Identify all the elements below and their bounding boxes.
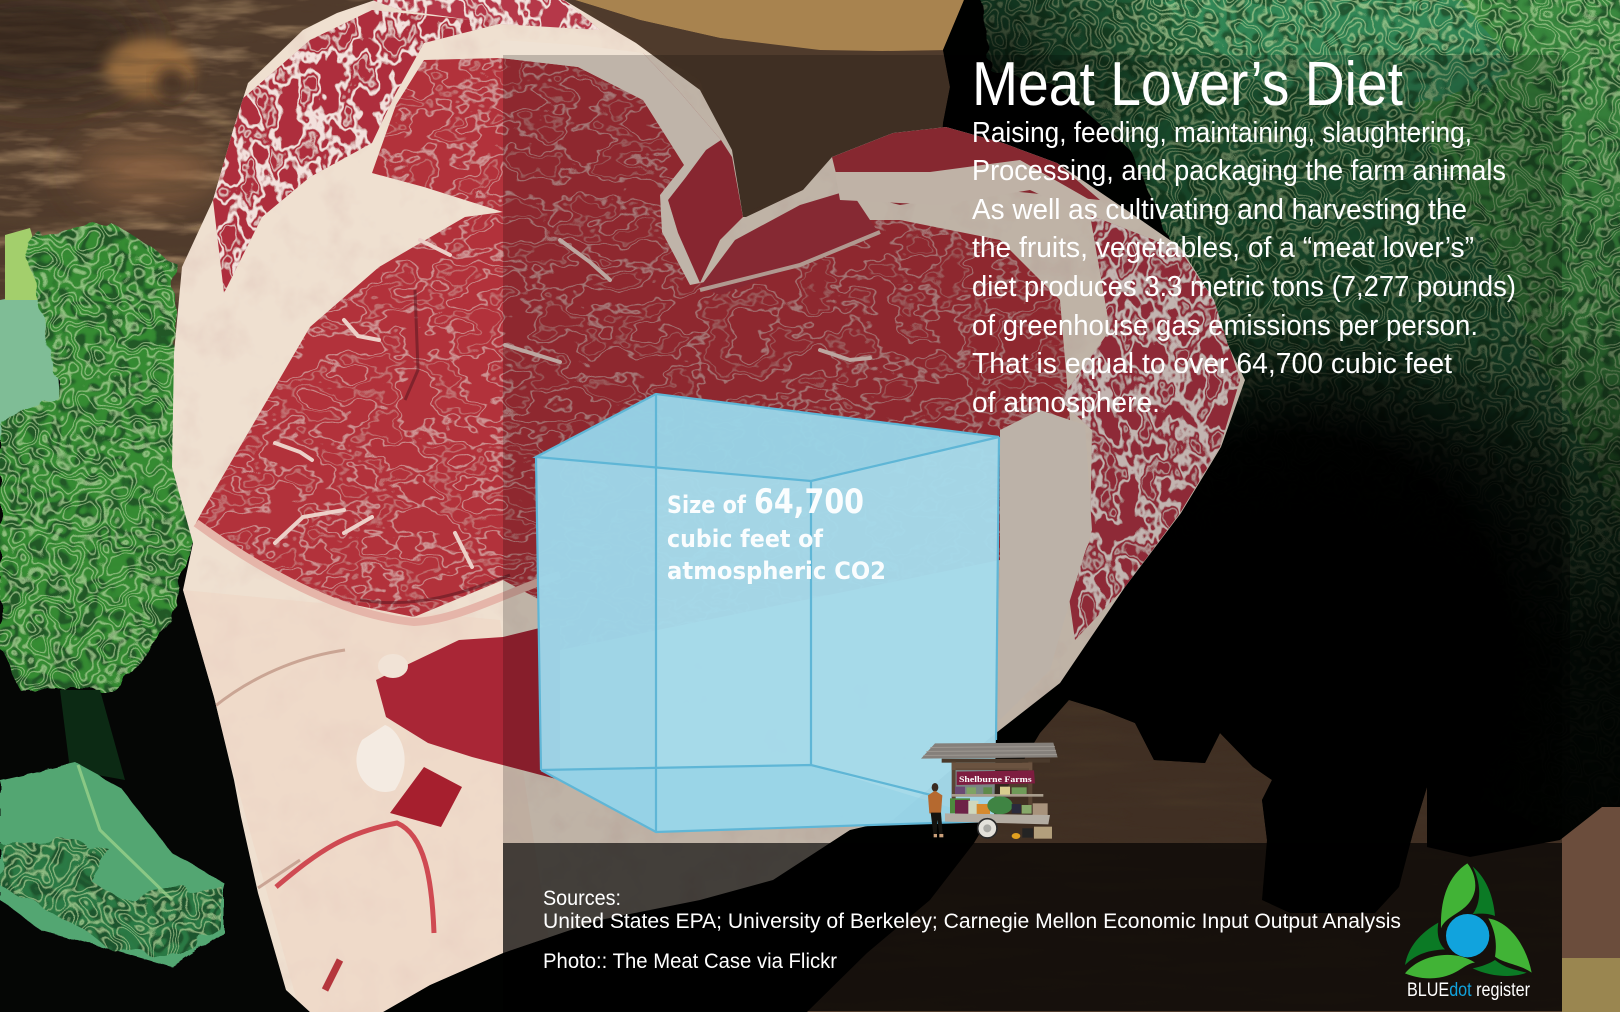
cube bottom face bbox=[541, 765, 994, 832]
kale on right bbox=[940, 0, 1620, 860]
text block: diet description: Processing, and packaging the farm animals bbox=[972, 155, 1506, 187]
text block: cube label bbox=[667, 482, 886, 585]
text block: diet description: That is equal to over 64,700 cubic feet bbox=[972, 348, 1452, 380]
text block: diet description: the fruits, vegetables, of a “meat lover’s” bbox=[972, 232, 1474, 264]
lower flesh patch bbox=[376, 623, 560, 780]
produce bbox=[952, 794, 1043, 797]
marbled upper-left lobe bbox=[213, 10, 503, 293]
banner bbox=[957, 770, 1035, 785]
title: Meat Lover’s Diet bbox=[972, 50, 1403, 119]
chart: CO2 volume cube bbox=[536, 394, 999, 832]
red sinew bbox=[390, 767, 462, 827]
person bbox=[928, 783, 943, 837]
illustration: farm stand and person for scale bbox=[921, 743, 1058, 839]
black shadow at lower left bbox=[0, 350, 330, 1012]
flap of meat at notch bbox=[700, 190, 880, 295]
rib strip at top of right lobe bbox=[832, 127, 1100, 205]
right fat patch bbox=[1000, 410, 1092, 602]
fat nub bbox=[378, 654, 408, 678]
text block: diet description: of greenhouse gas emissions per person. bbox=[972, 310, 1478, 342]
text block: sources: Photo:: The Meat Case via Flickr bbox=[543, 950, 837, 973]
wood right of panel bbox=[1562, 790, 1620, 960]
text block: cube label: atmospheric CO2 bbox=[667, 557, 886, 585]
lower fat warm tone bbox=[183, 590, 560, 1012]
steak bbox=[150, 0, 1260, 1012]
text block: diet description: Raising, feeding, maintaining, slaughtering, bbox=[972, 117, 1472, 149]
text block: cube label: cubic feet of bbox=[667, 525, 824, 553]
cube edges bbox=[536, 394, 999, 832]
right marbled flesh bbox=[1060, 215, 1240, 640]
roof bbox=[921, 743, 1058, 759]
dark creases on steak bbox=[360, 290, 510, 603]
curved sinew line bbox=[276, 823, 434, 933]
panel: footer dark band bbox=[503, 843, 1562, 1011]
fat cap curve on the upper eye bbox=[500, 40, 721, 285]
cube body bbox=[536, 394, 999, 832]
text block: cube label: Size of bbox=[667, 491, 746, 519]
thick white veins in the flesh bbox=[275, 240, 870, 567]
wordmark: BLUEdot register bbox=[1407, 980, 1531, 1001]
wheel bbox=[978, 819, 997, 838]
fat crease lines bbox=[196, 523, 560, 622]
red rim beyond fat cap bbox=[643, 53, 743, 283]
logo: BLUEdot register bbox=[1405, 863, 1532, 1001]
kale upper left bbox=[0, 222, 190, 690]
text block: diet description: As well as cultivating and harvesting the bbox=[972, 194, 1467, 226]
main flesh of the steak bbox=[196, 58, 1070, 650]
illustration: farm stand and person for scale: Shelburne Farms bbox=[959, 774, 1032, 784]
trailer bed bbox=[945, 813, 1050, 824]
cube left face bbox=[536, 394, 656, 832]
leaves bbox=[1441, 863, 1475, 928]
marbled top band bbox=[372, 0, 600, 30]
text block: diet description: of atmosphere. bbox=[972, 387, 1160, 419]
text block: diet description bbox=[972, 117, 1516, 419]
text block: sources: Sources: bbox=[543, 887, 621, 910]
fat base bbox=[150, 0, 1260, 1012]
blue dot bbox=[1446, 914, 1489, 957]
text block: diet description: diet produces 3.3 metric tons (7,277 pounds) bbox=[972, 271, 1516, 303]
text block: sources bbox=[543, 887, 1401, 973]
ground goods bbox=[1034, 827, 1052, 839]
black shadow of kale on right bbox=[380, 0, 1620, 1012]
kale lower left leaf bbox=[0, 690, 224, 967]
tan wood board at top bbox=[575, 0, 964, 52]
text block: sources: United States EPA; University of Berkeley; Carnegie Mellon Economic Input Output Analysis bbox=[543, 910, 1401, 933]
panel: translucent dark main overlay bbox=[503, 55, 1562, 843]
stand frame bbox=[942, 759, 1050, 763]
cube top face bbox=[536, 394, 999, 481]
text block: cube label: 64,700 bbox=[754, 482, 864, 522]
